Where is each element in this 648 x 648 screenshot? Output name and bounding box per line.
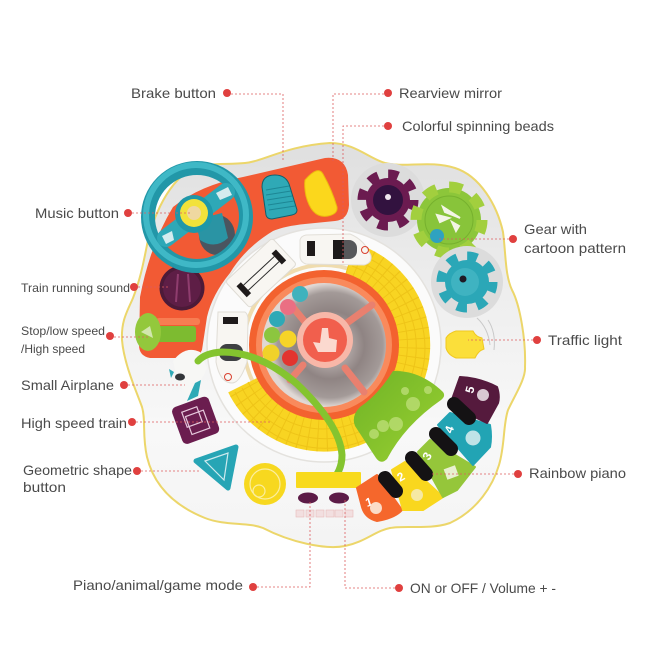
label: colorful spinning beads: Colorful spinning beads bbox=[402, 118, 554, 134]
label: stop/low speed /high speed bbox=[21, 324, 114, 356]
gear: purple bbox=[351, 163, 425, 237]
traffic light bbox=[446, 318, 494, 358]
mode and power switches bbox=[296, 492, 353, 517]
label: traffic light: Traffic light bbox=[548, 332, 622, 348]
label: rearview mirror: Rearview mirror bbox=[399, 85, 502, 101]
toy body bbox=[122, 143, 525, 547]
speed lever bbox=[135, 313, 200, 351]
key 2 bbox=[392, 462, 443, 510]
red control panel bbox=[139, 158, 349, 358]
high speed train bbox=[216, 312, 248, 383]
white train car: front bbox=[300, 234, 371, 265]
label: geometric shape button: Geometric shape bbox=[23, 462, 132, 478]
yellow slot bar bbox=[296, 472, 361, 488]
label: on or off / volume: ON or OFF / Volume + - bbox=[410, 580, 556, 596]
label: rainbow piano: Rainbow piano bbox=[529, 465, 626, 481]
label: geometric shape button bbox=[23, 462, 141, 495]
label: train running sound: Train running sound bbox=[21, 281, 130, 295]
key 4: 4 bbox=[442, 424, 457, 435]
rearview mirror bbox=[305, 171, 337, 216]
key 4 bbox=[438, 413, 491, 465]
geometric shape button: triangle bbox=[196, 447, 236, 488]
brake button bbox=[262, 175, 297, 219]
small airplane bbox=[169, 350, 207, 401]
label: stop/low speed /high speed: /High speed bbox=[21, 342, 85, 356]
key 5 bbox=[450, 377, 499, 423]
label: geometric shape button: button bbox=[23, 479, 66, 495]
label: brake button: Brake button bbox=[131, 85, 216, 101]
label: gear with cartoon pattern: Gear with bbox=[524, 221, 587, 237]
train running sound knob bbox=[160, 266, 204, 310]
key 3: 3 bbox=[419, 449, 435, 462]
green bell bbox=[354, 371, 444, 462]
yellow track ring bbox=[235, 252, 425, 448]
round yellow button bbox=[244, 463, 286, 505]
key 3 bbox=[418, 440, 475, 497]
finger button bbox=[297, 312, 353, 368]
label: stop/low speed /high speed: Stop/low speed bbox=[21, 324, 105, 338]
label: gear with cartoon pattern bbox=[509, 221, 626, 256]
label: piano/animal/game mode: Piano/animal/game mode bbox=[73, 577, 243, 593]
geometric shape button: square bbox=[171, 395, 221, 445]
label: gear with cartoon pattern: cartoon pattern bbox=[524, 240, 626, 256]
dome spokes bbox=[290, 305, 372, 392]
key 1 bbox=[357, 475, 402, 521]
rainbow piano bbox=[357, 377, 499, 521]
bead wire bbox=[198, 352, 342, 482]
gear: green with cartoon bbox=[416, 187, 482, 253]
black keys bbox=[385, 404, 469, 491]
beads bbox=[262, 286, 308, 366]
white train car: middle bbox=[225, 238, 297, 308]
label: high speed train: High speed train bbox=[21, 415, 127, 431]
key 1: 1 bbox=[364, 494, 375, 510]
train track ring bbox=[207, 228, 441, 462]
music button steering wheel bbox=[146, 165, 246, 266]
label: small airplane: Small Airplane bbox=[21, 377, 114, 393]
leader lines bbox=[110, 94, 537, 588]
gear: teal bbox=[431, 246, 503, 318]
glass dome with beads bbox=[249, 270, 399, 420]
label: music button: Music button bbox=[35, 205, 119, 221]
key 2: 2 bbox=[394, 469, 408, 485]
key 5: 5 bbox=[462, 384, 478, 395]
